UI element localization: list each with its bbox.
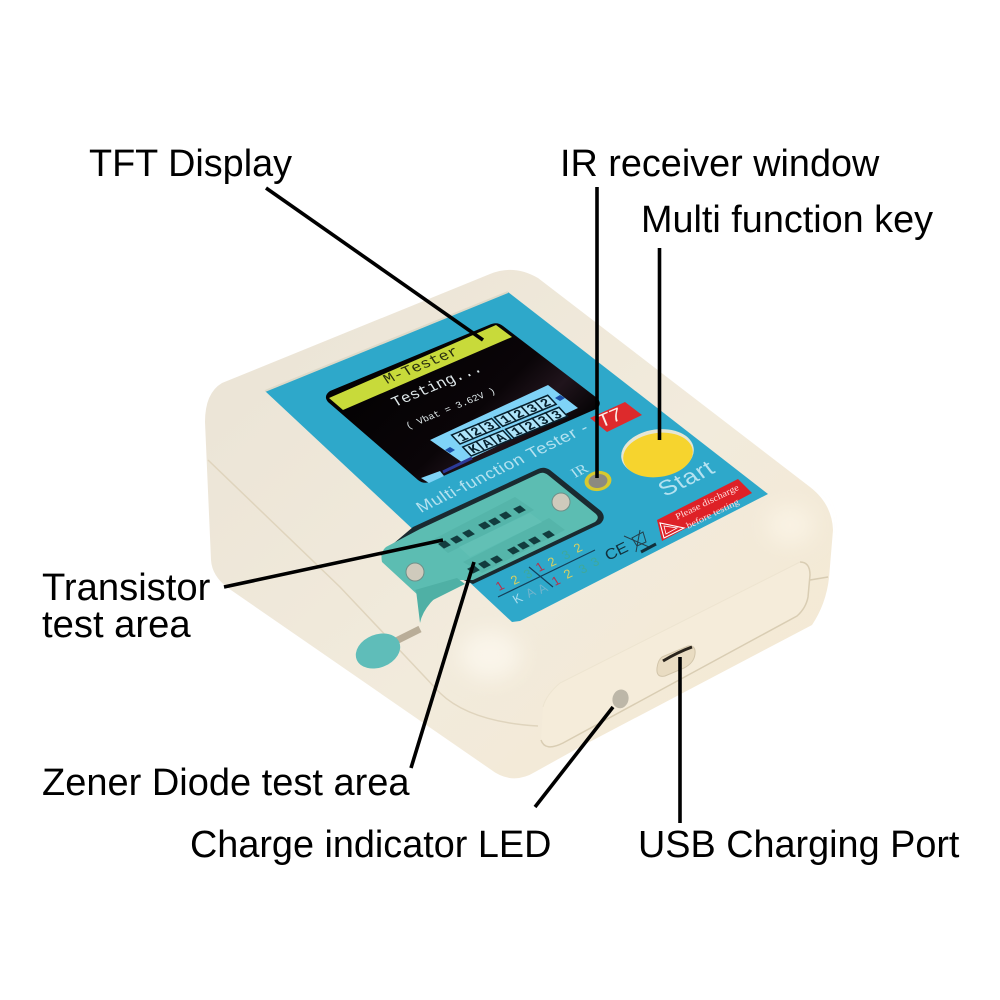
pin legend: 2 [508,573,522,588]
label: Zener Diode test area: Zener Diode test area [42,762,410,804]
label: TFT Display: TFT Display [89,143,292,185]
pin legend: A [535,581,551,597]
device body [205,270,833,778]
testing text: Testing... [388,360,486,411]
pin legend: 3 [576,562,590,577]
panel: blue faceplate [265,292,768,622]
pin legend: 3 [588,555,602,570]
leader lines [224,187,680,823]
pin map box: 1 [498,414,516,428]
panel: front insert [541,562,810,747]
ZIF socket [380,468,604,623]
label: USB Charging Port: USB Charging Port [638,824,960,866]
screws [406,563,424,581]
pin map box: K [466,443,485,457]
pin map box: A [493,432,511,446]
label: Start: Start [653,456,720,502]
pin legend: 2 [545,555,559,570]
pin map box: 2 [538,397,556,411]
pin legend: 1 [493,579,507,594]
icon: CE mark: CE [602,539,631,564]
screen header bar [329,325,512,410]
header text: M-Tester [380,344,462,388]
warning label: Please discharge [674,482,741,523]
LED [610,688,631,710]
pin map box [430,385,578,463]
label: Charge indicator LED: Charge indicator LED [190,824,551,866]
label: IR receiver window: IR receiver window [560,143,880,185]
pin map box: 2 [511,408,529,422]
lever handle [350,627,420,675]
progress bar [421,458,472,483]
pin legend: 3 [521,567,535,582]
label: Multi function key: Multi function key [641,199,933,241]
pin map box: 3 [482,420,499,434]
pin map box: 2 [522,420,540,434]
label: Transistor test area: Transistor [42,566,210,609]
pin legend: 2 [571,541,585,556]
socket hole block [432,497,534,553]
USB port shadow [663,647,692,661]
pin map box: 2 [468,426,486,440]
battery text: ( Vbat = 3.62V ) [404,386,498,431]
pin map box: 3 [549,409,567,423]
pin legend: 1 [533,560,547,575]
pin legend: 3 [559,548,573,563]
label: Transistor test area: test area [42,603,191,646]
USB port [657,646,695,676]
pin map box: 3 [536,414,553,429]
label: IR: IR [568,461,592,481]
badge: T7 [590,402,642,432]
pin map box: 3 [524,402,542,417]
pin legend: K [510,591,526,607]
icon: WEEE bin [624,530,656,552]
badge: T7: T7 [595,404,625,432]
pin legend: A [523,585,539,601]
warning label: before testing [685,497,741,532]
pin legend [493,541,602,607]
pin map box: A [479,437,498,452]
pin legend: 2 [561,567,575,582]
pin legend: 1 [549,574,563,589]
yellow start button [618,425,697,482]
warning label [657,479,752,541]
TFT screen [326,323,600,483]
pin map box: 1 [509,426,527,440]
pin map box: 1 [455,431,473,445]
holes [439,506,554,573]
IR receiver window [583,469,613,493]
label: Multi-function Tester: Multi-function Tester - [412,419,593,516]
